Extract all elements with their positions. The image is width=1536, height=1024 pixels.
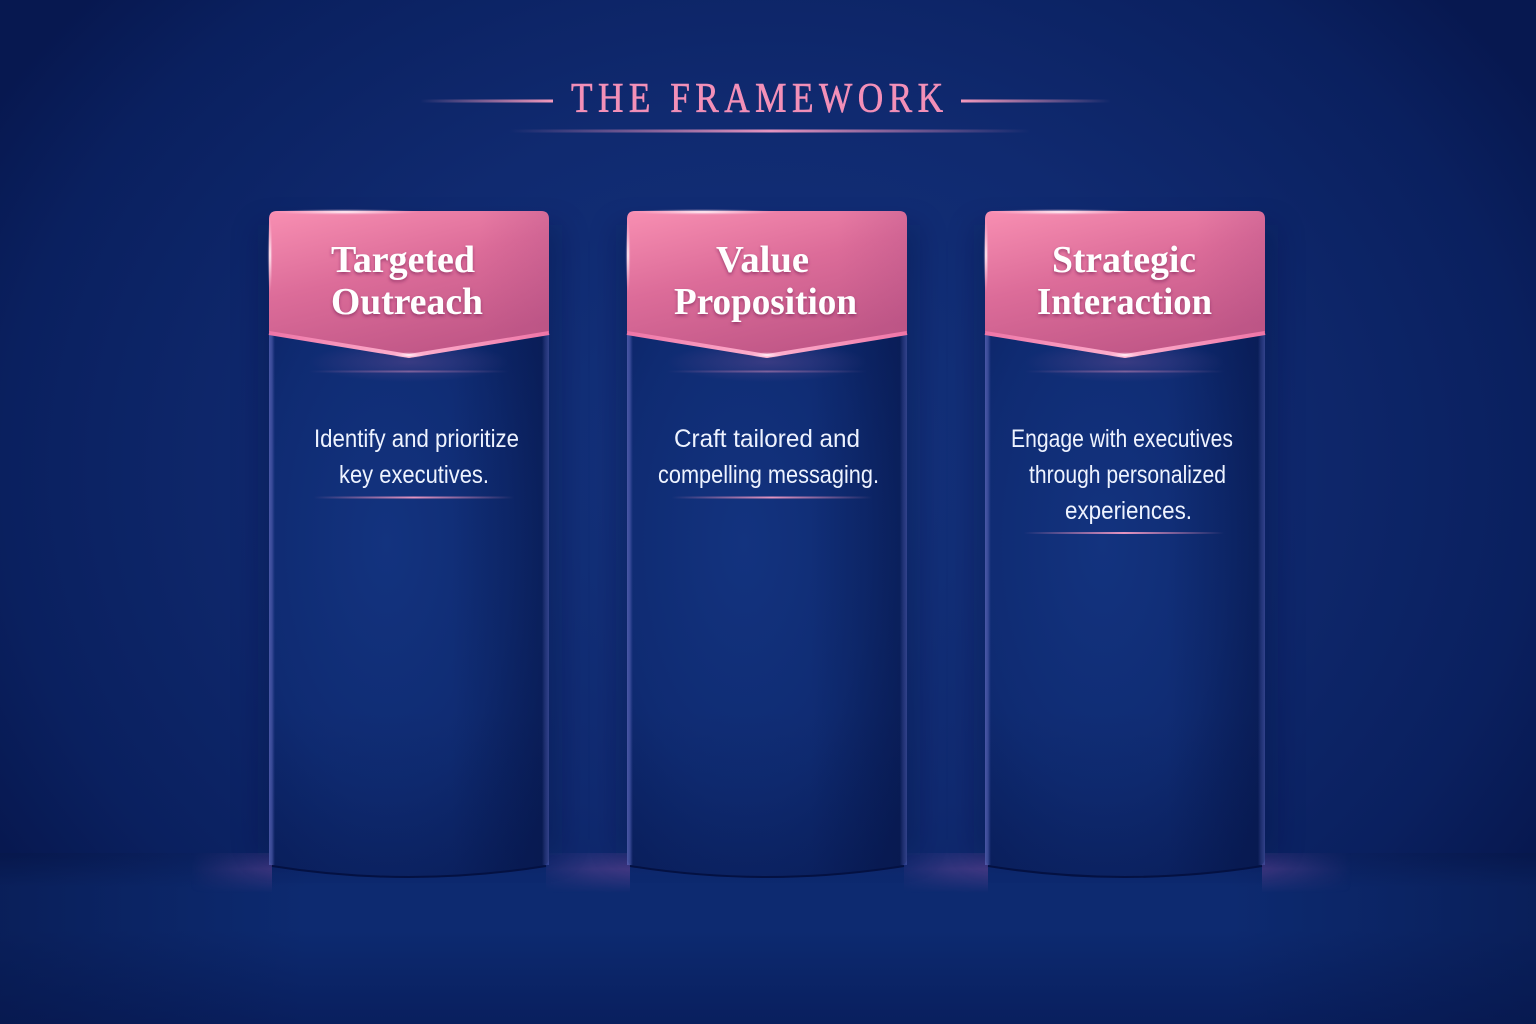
floor glows	[204, 853, 1336, 889]
heading: Strategic	[1052, 239, 1196, 281]
description: key executives.	[339, 461, 489, 489]
heading: Interaction	[1037, 281, 1212, 323]
description rule	[672, 496, 872, 498]
description: compelling messaging.	[658, 461, 879, 489]
description: Craft tailored and	[674, 425, 860, 453]
heading: Outreach	[331, 281, 483, 323]
title	[420, 75, 1111, 132]
heading: Value	[716, 239, 809, 281]
panel: Value Proposition	[616, 209, 920, 877]
pillar shape	[616, 209, 920, 877]
title underline	[510, 130, 1030, 132]
description rule	[1024, 532, 1224, 534]
description: experiences.	[1065, 497, 1192, 525]
heading: Targeted	[331, 239, 475, 281]
description: Engage with executives	[1011, 425, 1233, 453]
description: through personalized	[1029, 461, 1226, 489]
title right rule	[961, 100, 1111, 102]
title text: THE FRAMEWORK	[571, 75, 943, 122]
panel: Targeted Outreach	[258, 209, 562, 877]
description rule	[314, 496, 514, 498]
heading: Proposition	[674, 281, 857, 323]
pillar shape	[258, 209, 562, 877]
panel: Strategic Interaction	[974, 209, 1278, 877]
title left rule	[420, 100, 553, 102]
pillar shape	[974, 209, 1278, 877]
description: Identify and prioritize	[314, 425, 519, 453]
